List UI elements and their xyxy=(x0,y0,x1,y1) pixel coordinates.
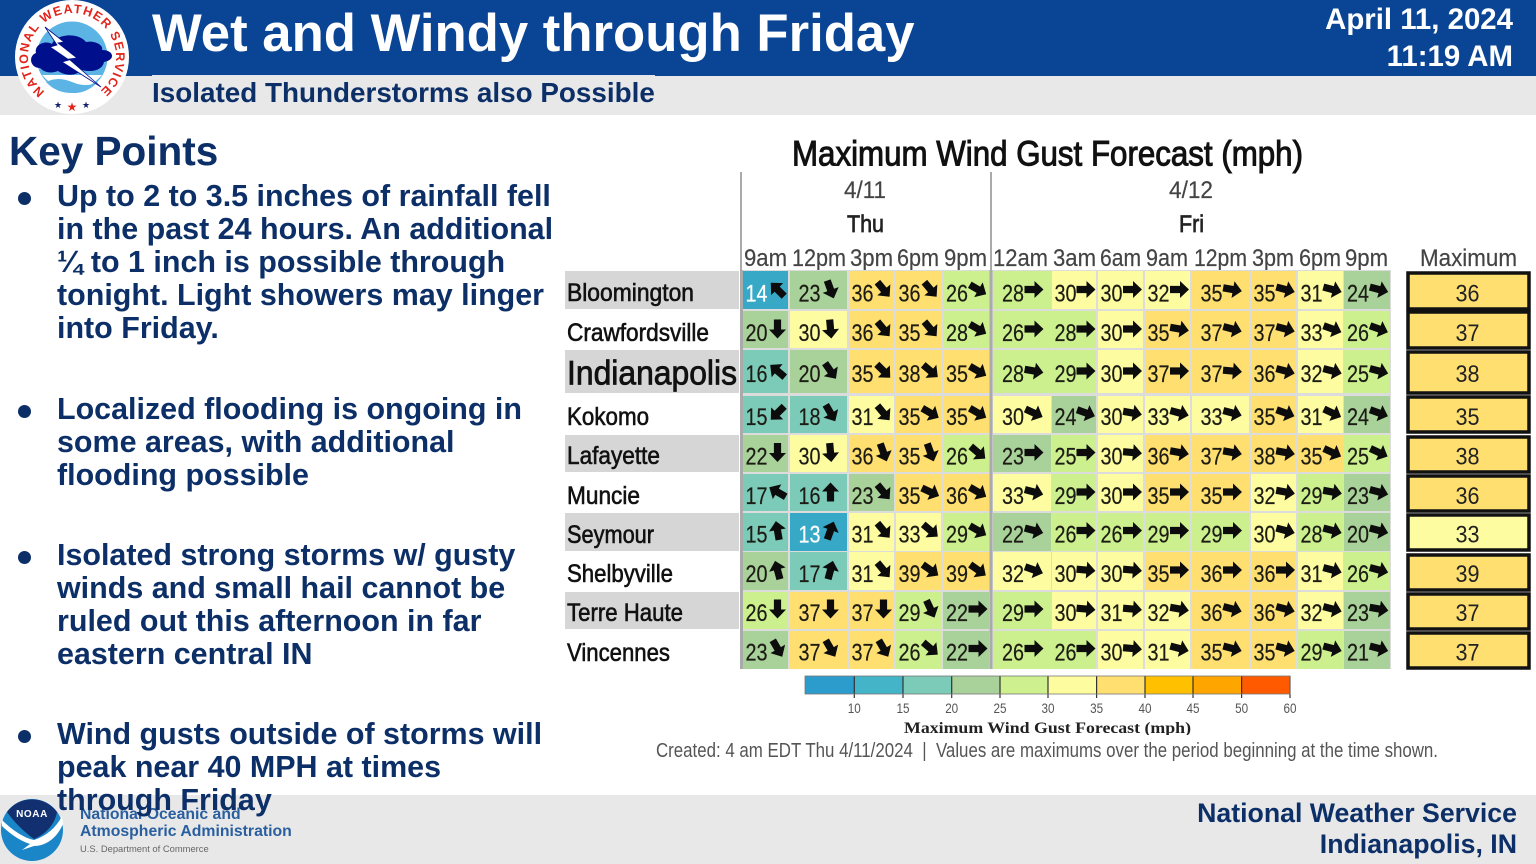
maximum column: 39 xyxy=(1456,561,1480,588)
city labels: Lafayette xyxy=(567,442,660,470)
row: Shelbyville: 26 xyxy=(1347,561,1369,588)
row: Bloomington: 32 xyxy=(1148,280,1170,308)
date headers xyxy=(844,177,1213,238)
row: Terre Haute: 32 xyxy=(1300,600,1322,627)
date headers: 4/12 xyxy=(1169,177,1213,204)
city labels: Kokomo xyxy=(567,403,649,431)
row: Muncie: 35 xyxy=(898,483,920,510)
row: Terre Haute: 37 xyxy=(798,600,820,627)
row: Kokomo xyxy=(743,396,1391,433)
row: Shelbyville: 36 xyxy=(1254,561,1276,588)
hour headers: 9pm xyxy=(1345,245,1388,272)
row: Indianapolis: 29 xyxy=(1054,361,1076,388)
row: Indianapolis: 38 xyxy=(898,361,920,388)
row: Bloomington: 30 xyxy=(1054,280,1076,308)
row: Seymour: 26 xyxy=(1054,522,1076,548)
row: Bloomington xyxy=(743,271,1390,309)
row: Crawfordsville: 33 xyxy=(1300,320,1322,347)
row: Seymour: 26 xyxy=(1100,522,1122,548)
row: Shelbyville: 31 xyxy=(852,561,874,588)
row: Muncie: 35 xyxy=(1200,483,1222,510)
maximum column: 36 xyxy=(1456,280,1480,308)
row: Indianapolis: 30 xyxy=(1100,361,1122,388)
bullet: wind gusts: through Friday xyxy=(57,783,272,817)
city labels: Terre Haute xyxy=(567,599,683,627)
row: Terre Haute: 29 xyxy=(1002,600,1024,627)
NOAA agency name xyxy=(80,806,292,854)
row: Indianapolis: 35 xyxy=(852,361,874,388)
row: Shelbyville xyxy=(743,552,1390,590)
row: Terre Haute: 31 xyxy=(1100,600,1122,627)
row: Crawfordsville: 35 xyxy=(898,320,920,347)
row: Kokomo: 30 xyxy=(1002,404,1024,431)
row: Vincennes: 37 xyxy=(798,640,820,666)
grid background and day dividers xyxy=(740,172,1391,669)
row: Vincennes: 21 xyxy=(1347,640,1369,666)
city labels: Vincennes xyxy=(567,639,670,667)
row: Seymour xyxy=(743,513,1390,551)
row: Seymour: 29 xyxy=(946,522,968,548)
row: Muncie xyxy=(743,474,1390,511)
row: Kokomo: 30 xyxy=(1100,404,1122,431)
row: Muncie: 23 xyxy=(852,483,874,510)
row: Seymour: 29 xyxy=(1148,522,1170,548)
row: Lafayette: 30 xyxy=(798,444,820,470)
row: Seymour: 20 xyxy=(1347,522,1369,548)
bullet: storms xyxy=(18,538,516,671)
row: Shelbyville: 17 xyxy=(798,561,820,588)
row: Muncie: 29 xyxy=(1054,483,1076,510)
legend tick labels: 10 xyxy=(848,700,861,716)
row: Seymour: 22 xyxy=(1002,522,1024,548)
bullet: rainfall: Up to 2 to 3.5 inches of rainfall fell xyxy=(57,179,551,213)
icon: NOAA logo: NOAA xyxy=(16,809,48,820)
maximum column: 35 xyxy=(1456,404,1480,431)
row: Seymour: 33 xyxy=(898,522,920,548)
row: Muncie: 17 xyxy=(746,483,768,510)
row: Shelbyville: 39 xyxy=(946,561,968,588)
row: Seymour: 13 xyxy=(798,522,820,548)
chart title: Maximum Wind Gust Forecast (mph) xyxy=(792,134,1303,174)
bullet: wind gusts xyxy=(18,717,542,817)
hour headers: 9am xyxy=(1146,245,1188,272)
row: Crawfordsville: 36 xyxy=(852,320,874,347)
bullet: storms: eastern central IN xyxy=(57,637,312,671)
icon: National Weather Service logo: ★ xyxy=(82,100,90,110)
row: Seymour: 30 xyxy=(1254,522,1276,548)
row: Bloomington: 23 xyxy=(798,280,820,308)
row: Crawfordsville: 30 xyxy=(1100,320,1122,347)
row: Indianapolis: 36 xyxy=(1254,361,1276,388)
row: Lafayette: 22 xyxy=(746,444,768,470)
row: Terre Haute: 36 xyxy=(1254,600,1276,627)
maximum column xyxy=(1408,273,1529,668)
city labels xyxy=(565,271,739,667)
row: Lafayette: 30 xyxy=(1100,444,1122,470)
footer band xyxy=(0,795,1536,864)
row: Muncie: 29 xyxy=(1300,483,1322,510)
maximum column: 38 xyxy=(1456,444,1480,470)
row: Kokomo: 31 xyxy=(1300,404,1322,431)
city labels: Bloomington xyxy=(567,279,694,307)
city labels: Seymour xyxy=(567,521,654,549)
row: Lafayette: 36 xyxy=(852,444,874,470)
row: Kokomo: 24 xyxy=(1347,404,1369,431)
row: Crawfordsville: 35 xyxy=(1148,320,1170,347)
row: Bloomington: 14 xyxy=(746,280,768,308)
legend tick labels: 20 xyxy=(945,700,958,716)
row: Shelbyville: 31 xyxy=(1300,561,1322,588)
row: Indianapolis: 37 xyxy=(1148,361,1170,388)
row: Indianapolis: 28 xyxy=(1002,361,1024,388)
bullet: flooding: some areas, with additional xyxy=(57,425,454,459)
row: Crawfordsville: 37 xyxy=(1254,320,1276,347)
maximum column: 33 xyxy=(1456,522,1480,548)
maximum column: 36 xyxy=(1456,483,1480,510)
NOAA agency name: National Oceanic and xyxy=(80,806,241,823)
row: Bloomington: 36 xyxy=(898,280,920,308)
city labels: Crawfordsville xyxy=(567,319,709,347)
legend tick labels: 40 xyxy=(1138,700,1152,716)
row: Vincennes xyxy=(743,631,1390,669)
hour headers: 3am xyxy=(1053,245,1096,272)
row: Vincennes: 26 xyxy=(898,640,920,666)
city labels: Muncie xyxy=(567,482,640,510)
subtitle band xyxy=(0,76,1536,115)
row: Crawfordsville: 20 xyxy=(746,320,768,347)
maximum column: 38 xyxy=(1456,361,1480,388)
row: Lafayette: 26 xyxy=(946,444,968,470)
bullet: flooding: Localized flooding is ongoing in xyxy=(57,392,522,426)
bullet: flooding: flooding possible xyxy=(57,458,309,492)
row: Seymour: 29 xyxy=(1200,522,1222,548)
row: Terre Haute: 37 xyxy=(852,600,874,627)
row: Shelbyville: 20 xyxy=(746,561,768,588)
row: Muncie: 36 xyxy=(946,483,968,510)
legend: colour scale xyxy=(805,676,1290,698)
hour headers: 12am xyxy=(993,245,1048,272)
bullet: wind gusts: peak near 40 MPH at times xyxy=(57,750,441,784)
row: Shelbyville: 36 xyxy=(1200,561,1222,588)
row: Vincennes: 31 xyxy=(1148,640,1170,666)
row: Vincennes: 30 xyxy=(1100,640,1122,666)
row: Seymour: 15 xyxy=(746,522,768,548)
row: Crawfordsville xyxy=(743,311,1391,348)
row: Seymour: 31 xyxy=(852,522,874,548)
row: Muncie: 30 xyxy=(1100,483,1122,510)
city labels: Shelbyville xyxy=(567,560,673,588)
row: Kokomo: 35 xyxy=(1254,404,1276,431)
legend tick labels: 60 xyxy=(1284,700,1297,716)
row: Indianapolis xyxy=(743,350,1390,393)
row: Terre Haute: 22 xyxy=(946,600,968,627)
bullet: rainfall xyxy=(18,179,553,345)
row: Terre Haute xyxy=(743,592,1390,629)
row: Bloomington: 36 xyxy=(852,280,874,308)
hour headers: 6am xyxy=(1100,245,1141,272)
row: Muncie: 23 xyxy=(1347,483,1369,510)
legend tick labels: 35 xyxy=(1090,700,1103,716)
row: Muncie: 16 xyxy=(798,483,820,510)
row: Kokomo: 31 xyxy=(852,404,874,431)
row: Terre Haute: 36 xyxy=(1200,600,1222,627)
row: Shelbyville: 32 xyxy=(1002,561,1024,588)
hour headers: 6pm xyxy=(897,245,939,272)
legend tick labels: 25 xyxy=(994,700,1007,716)
subtitle: Isolated Thunderstorms also Possible xyxy=(152,77,655,108)
bullet: wind gusts: Wind gusts outside of storms will xyxy=(57,717,542,751)
row: Kokomo: 33 xyxy=(1148,404,1170,431)
footer office name xyxy=(1197,798,1517,859)
row: Vincennes: 22 xyxy=(946,640,968,666)
row: Vincennes: 29 xyxy=(1300,640,1322,666)
row: Shelbyville: 30 xyxy=(1100,561,1122,588)
footer office name: Indianapolis, IN xyxy=(1320,829,1517,859)
hour headers: 12pm xyxy=(1194,245,1247,272)
icon: NOAA logo xyxy=(1,799,63,861)
row: Lafayette: 38 xyxy=(1254,444,1276,470)
maximum column: 37 xyxy=(1456,320,1480,347)
bullet: flooding xyxy=(18,392,522,492)
row: Lafayette: 35 xyxy=(898,444,920,470)
row: Terre Haute: 30 xyxy=(1054,600,1076,627)
row: Lafayette: 35 xyxy=(1300,444,1322,470)
row: Kokomo: 24 xyxy=(1054,404,1076,431)
date headers: 4/11 xyxy=(844,177,886,204)
row: Lafayette: 37 xyxy=(1200,444,1222,470)
hour headers: Maximum xyxy=(1420,245,1517,272)
row: Lafayette: 25 xyxy=(1054,444,1076,470)
row: Crawfordsville: 30 xyxy=(798,320,820,347)
icon: National Weather Service logo: ★ xyxy=(54,100,62,110)
bullet: rainfall: in the past 24 hours. An additional xyxy=(57,212,553,246)
row: Bloomington: 28 xyxy=(1002,280,1024,308)
bullet: storms: Isolated strong storms w/ gusty xyxy=(57,538,515,572)
row: Muncie: 35 xyxy=(1148,483,1170,510)
hour headers: 9am xyxy=(744,245,787,272)
row: Muncie: 32 xyxy=(1254,483,1276,510)
date and time: 11:19 AM xyxy=(1387,40,1513,72)
row: Lafayette: 36 xyxy=(1148,444,1170,470)
row: Lafayette xyxy=(743,435,1391,472)
city labels: Indianapolis xyxy=(567,354,737,392)
maximum column: 37 xyxy=(1456,600,1480,627)
row: Indianapolis: 37 xyxy=(1200,361,1222,388)
row: Terre Haute: 26 xyxy=(746,600,768,627)
bullet: rainfall: tonight. Light showers may linger xyxy=(57,278,544,312)
row: Indianapolis: 25 xyxy=(1347,361,1369,388)
date headers: Thu xyxy=(847,211,884,238)
row: Vincennes: 23 xyxy=(746,640,768,666)
row: Shelbyville: 35 xyxy=(1148,561,1170,588)
legend tick labels: 30 xyxy=(1042,700,1055,716)
row: Terre Haute: 23 xyxy=(1347,600,1369,627)
date and time: April 11, 2024 xyxy=(1325,3,1513,36)
icon: National Weather Service logo: NATIONAL WEATHER SERVICE xyxy=(19,4,125,98)
row: Bloomington: 31 xyxy=(1300,280,1322,308)
row: Crawfordsville: 26 xyxy=(1002,320,1024,347)
hour headers: 9pm xyxy=(944,245,987,272)
legend tick labels: 15 xyxy=(896,700,910,716)
bullet: storms: winds and small hail cannot be xyxy=(57,571,505,605)
row: Kokomo: 35 xyxy=(946,404,968,431)
row: Terre Haute: 32 xyxy=(1148,600,1170,627)
maximum column: 37 xyxy=(1456,640,1480,666)
hour headers: 3pm xyxy=(850,245,893,272)
bullet: rainfall: into Friday. xyxy=(57,311,219,345)
row: Vincennes: 26 xyxy=(1054,640,1076,666)
row: Bloomington: 26 xyxy=(946,280,968,308)
title: Wet and Windy through Friday xyxy=(152,4,915,63)
hour headers: 12pm xyxy=(792,245,846,272)
panel: key points list xyxy=(18,179,553,817)
row: Vincennes: 37 xyxy=(852,640,874,666)
row: Indianapolis: 32 xyxy=(1300,361,1322,388)
legend tick labels: 45 xyxy=(1186,700,1200,716)
legend title: Maximum Wind Gust Forecast (mph) xyxy=(904,720,1191,737)
row: Indianapolis: 35 xyxy=(946,361,968,388)
row: Crawfordsville: 26 xyxy=(1347,320,1369,347)
row: Vincennes: 35 xyxy=(1254,640,1276,666)
row: Crawfordsville: 37 xyxy=(1200,320,1222,347)
bullet: storms: ruled out this afternoon in far xyxy=(57,604,481,638)
hour headers xyxy=(744,245,1517,272)
row: Bloomington: 30 xyxy=(1100,280,1122,308)
NOAA agency name: U.S. Department of Commerce xyxy=(80,843,209,854)
row: Terre Haute: 29 xyxy=(898,600,920,627)
footer office name: National Weather Service xyxy=(1197,798,1517,828)
date and time xyxy=(1325,3,1513,72)
legend tick labels: 50 xyxy=(1235,700,1248,716)
row: Crawfordsville: 28 xyxy=(1054,320,1076,347)
row: Indianapolis: 16 xyxy=(746,361,768,388)
row: Crawfordsville: 28 xyxy=(946,320,968,347)
date headers: Fri xyxy=(1179,211,1204,238)
hour headers: 6pm xyxy=(1299,245,1341,272)
row: Kokomo: 15 xyxy=(746,404,768,431)
legend tick labels xyxy=(848,700,1297,716)
row: Indianapolis: 20 xyxy=(798,361,820,388)
row: Seymour: 28 xyxy=(1300,522,1322,548)
row: Vincennes: 26 xyxy=(1002,640,1024,666)
row: Lafayette: 25 xyxy=(1347,444,1369,470)
row: Kokomo: 35 xyxy=(898,404,920,431)
heading: key points: Key Points xyxy=(9,128,218,174)
hour headers: 3pm xyxy=(1252,245,1294,272)
row: Lafayette: 23 xyxy=(1002,444,1024,470)
row: Shelbyville: 30 xyxy=(1054,561,1076,588)
row: Bloomington: 35 xyxy=(1200,280,1222,308)
row: Bloomington: 24 xyxy=(1347,280,1369,308)
NOAA agency name: Atmospheric Administration xyxy=(80,823,292,840)
icon: National Weather Service logo: ★ xyxy=(67,100,77,114)
row: Bloomington: 35 xyxy=(1254,280,1276,308)
row: Vincennes: 35 xyxy=(1200,640,1222,666)
row: Kokomo: 33 xyxy=(1200,404,1222,431)
row: Shelbyville: 39 xyxy=(898,561,920,588)
bullet: rainfall: ¼ to 1 inch is possible through xyxy=(57,245,505,279)
row: Muncie: 33 xyxy=(1002,483,1024,510)
row: Kokomo: 18 xyxy=(798,404,820,431)
header band xyxy=(0,0,1536,76)
